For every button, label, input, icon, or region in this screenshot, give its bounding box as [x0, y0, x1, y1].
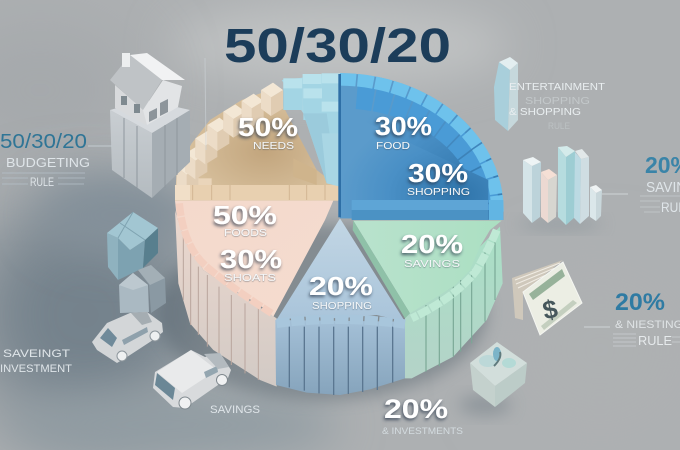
- label: 50% needs: NEEDS: [253, 141, 294, 152]
- label: 20% investing rule: & NIESTING: [615, 319, 680, 331]
- icon: gift box: [459, 342, 527, 415]
- label: 20% savings: [401, 229, 463, 270]
- icon: van: [153, 350, 231, 409]
- bar 4: [574, 149, 589, 224]
- icon: teal blocks: [107, 212, 166, 313]
- label: entertainment and shopping: & SHOPPING: [509, 107, 581, 118]
- connector line: investing rule: [584, 326, 610, 328]
- label: saving investment: INVESTMENT: [0, 363, 72, 375]
- label: 20% investing rule: [613, 289, 680, 348]
- label: 50% needs: [238, 112, 298, 152]
- label: 20% shopping: SHOPPING: [312, 301, 372, 312]
- bar 2: [541, 169, 557, 223]
- connector line: top title: [205, 58, 206, 150]
- label: entertainment and shopping: [509, 82, 605, 131]
- icon: dollar bills: $: [540, 293, 561, 326]
- label: 30% food: [375, 111, 432, 152]
- label: 20% investing rule: RULE: [638, 333, 672, 348]
- connector line: budgeting rule: [88, 145, 112, 147]
- pie slice: pink foods and shorts: [175, 201, 333, 317]
- label: 50% foods: [213, 200, 277, 239]
- pie wall: powder blue: [275, 320, 405, 395]
- label: 20% investing rule: 20%: [615, 289, 665, 316]
- pie slice: blue food and shopping: [338, 73, 503, 220]
- pie rim: pink: [179, 203, 272, 313]
- label: 50% foods: 50%: [213, 200, 277, 230]
- label: 50% foods: FOODS: [224, 228, 267, 239]
- icon: car: [92, 312, 163, 363]
- label: entertainment and shopping: SHOPPING: [525, 96, 590, 107]
- icon: house on pedestal: [110, 53, 190, 198]
- label: 50/30/20 budgeting rule: [0, 131, 90, 189]
- label: 30% shopping: [407, 158, 470, 198]
- label: 30% shopping: 30%: [408, 158, 468, 188]
- label: 30% shoats: SHOATS: [224, 273, 276, 284]
- label: 20% savings: 20%: [401, 229, 463, 259]
- label: saving investment: SAVEINGT: [3, 348, 70, 360]
- bar 5: [590, 185, 602, 221]
- bar 3: [558, 146, 575, 225]
- label: 50/30/20 budgeting rule: BUDGETING: [6, 155, 90, 170]
- icon: bar chart blocks: [518, 146, 602, 230]
- label: 50/30/20 budgeting rule: RULE: [30, 175, 54, 189]
- label: 30% food: 30%: [375, 111, 432, 141]
- label: entertainment and shopping: ENTERTAINMENT: [509, 82, 605, 93]
- label: 30% shopping: SHOPPING: [407, 187, 470, 198]
- icon: tall block: [494, 57, 518, 131]
- label: 30% shoats: 30%: [220, 244, 282, 274]
- pie chart: [175, 73, 503, 395]
- label: savings: SAVINGS: [210, 404, 260, 416]
- label: 20% and investments: & INVESTMENTS: [382, 426, 463, 437]
- pie wall: pink: [175, 210, 277, 387]
- pie shadow: [157, 224, 487, 400]
- label: 20% and investments: 20%: [384, 394, 448, 424]
- label: 20% savings rule: [640, 152, 680, 215]
- pie slice: tan needs: [175, 83, 338, 201]
- label: 20% savings: SAVINGS: [404, 259, 460, 270]
- label: 20% shopping: 20%: [309, 271, 373, 301]
- pie wall: green: [405, 227, 503, 378]
- label: 30% food: FOOD: [376, 141, 410, 152]
- label: entertainment and shopping: RULE: [548, 121, 570, 131]
- label: 30% shoats: [220, 244, 282, 284]
- bar 1: [523, 157, 541, 223]
- label: saving investment: [0, 348, 72, 375]
- title: 50/30/20: [224, 20, 451, 73]
- pie slice: green savings: [353, 221, 502, 318]
- label: 50/30/20 budgeting rule: 50/30/20: [0, 131, 87, 153]
- label: 20% shopping: [309, 271, 373, 312]
- pie slice: powder blue shopping: [276, 218, 405, 324]
- label: 50% needs: 50%: [238, 112, 298, 142]
- icon: dollar bills: [512, 260, 582, 335]
- label: 20% and investments: [382, 394, 463, 437]
- pie slice: light blue: [282, 73, 340, 187]
- connector line: savings rule: [602, 193, 628, 195]
